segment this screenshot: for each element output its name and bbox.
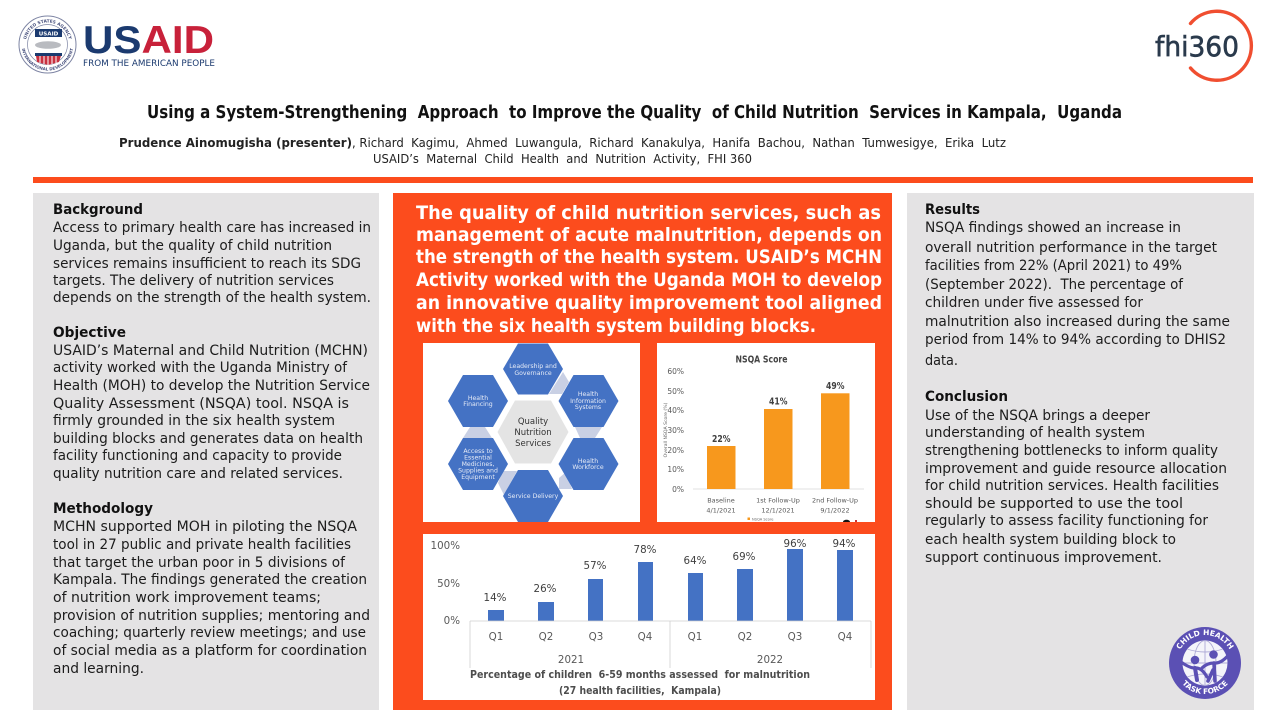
hexagon: information systems: Systems	[575, 404, 601, 411]
objective section	[53, 325, 370, 482]
icon: USAID seal: INTERNATIONAL DEVELOPMENT	[22, 48, 73, 70]
y axis labels	[667, 367, 684, 494]
panel: centre column	[393, 193, 892, 710]
hexagon: medicines: Medicines,	[462, 461, 494, 468]
y axis labels: 60%	[667, 367, 684, 376]
title: Using a System-Strengthening Approach to Improve the Quality of Child Nutrition Services in Kampala, Uganda	[147, 103, 1122, 123]
conclusion section	[925, 389, 1227, 566]
bar values: 69%	[733, 551, 756, 563]
logo text: CHILD HEALTH	[1176, 630, 1234, 650]
hexagon: medicines: Access to	[463, 448, 493, 455]
background section: Background	[53, 202, 143, 218]
methodology section: that target the urban poor in 5 divisions of	[53, 555, 346, 571]
chart caption: (27 health facilities, Kampala)	[559, 684, 721, 697]
hexagon: service delivery	[503, 470, 563, 522]
category labels	[706, 496, 858, 514]
presenter name: Prudence Ainomugisha (presenter)	[119, 135, 352, 150]
conclusion section: regularly to assess facility functioning for	[925, 513, 1208, 529]
bar values: 49%	[826, 381, 845, 392]
methodology section: coaching; quarterly review meetings; and use	[53, 625, 366, 641]
quarter labels: Q3	[589, 631, 603, 643]
methodology section: tool in 27 public and private health facilities	[53, 537, 351, 553]
objective section: Quality Assessment (NSQA) tool. NSQA is	[53, 396, 349, 412]
conclusion section: improvement and guide resource allocation	[925, 461, 1227, 477]
objective section: Objective	[53, 325, 126, 341]
results section: facilities from 22% (April 2021) to 49%	[925, 258, 1182, 274]
category labels: 9/1/2022	[820, 506, 850, 514]
hexagon: leadership: Governance	[514, 370, 552, 377]
hexagon: information systems	[558, 375, 618, 427]
hexagon: leadership	[503, 344, 563, 394]
conclusion section: Use of the NSQA brings a deeper	[925, 408, 1150, 424]
chart caption: Percentage of children 6-59 months assessed for malnutrition	[470, 668, 810, 681]
results section: malnutrition also increased during the same	[925, 314, 1230, 330]
panel: right column	[907, 193, 1254, 710]
figures	[1181, 650, 1231, 681]
year labels: 2021	[558, 654, 584, 666]
objective section: quality nutrition care and related services.	[53, 466, 343, 482]
methodology section: provision of nutrition supplies; mentoring and	[53, 608, 370, 624]
wordmark: fhi360: fhi360	[1155, 30, 1239, 63]
quarter labels: Q1	[688, 631, 702, 643]
logo text	[1176, 630, 1234, 694]
bar values: 57%	[584, 560, 607, 572]
hexagon: centre	[498, 400, 568, 464]
results section: (September 2022). The percentage of	[925, 277, 1184, 293]
background section: Uganda, but the quality of child nutrition	[53, 238, 332, 254]
conclusion section: support continuous improvement.	[925, 550, 1162, 566]
key message	[416, 202, 882, 337]
chart title: NSQA Score	[736, 354, 788, 366]
methodology section: of nutrition work improvement teams;	[53, 590, 321, 606]
icon: USAID seal: UNITED STATES AGENCY	[23, 19, 72, 39]
bars	[707, 393, 850, 489]
chart: NSQA score	[657, 343, 875, 522]
conclusion section: should be supported to use the tool	[925, 496, 1183, 512]
hexagon: service delivery: Service Delivery	[508, 493, 559, 500]
category labels: 12/1/2021	[761, 506, 795, 514]
logo: USAID	[18, 16, 215, 74]
key message: the strength of the health system. USAID’s MCHN	[416, 246, 882, 268]
conclusion section: Conclusion	[925, 389, 1008, 405]
chart: children assessed for malnutrition	[423, 534, 875, 700]
hexagon: information systems: Information	[570, 398, 606, 405]
hexagon: workforce: Health	[578, 458, 598, 465]
bar values: 41%	[769, 396, 788, 408]
hexagon: financing: Financing	[463, 401, 493, 408]
conclusion section: each health system building block to	[925, 532, 1176, 548]
hexagon: medicines: Supplies and	[458, 468, 498, 474]
icon: USAID seal	[18, 16, 76, 74]
objective section: facility functioning and capacity to provide	[53, 448, 342, 464]
y axis labels: 20%	[667, 446, 684, 455]
methodology section: of social media as a platform for coordination	[53, 643, 367, 659]
panel: left column	[33, 193, 379, 710]
hexagon: centre: Nutrition	[514, 428, 552, 438]
y axis labels: 40%	[667, 406, 684, 415]
key message: The quality of child nutrition services, such as	[416, 202, 881, 224]
quarter labels: Q2	[539, 631, 553, 643]
background section	[53, 202, 371, 306]
logo text: TASK FORCE	[1183, 680, 1228, 694]
bar values: 94%	[833, 538, 856, 550]
objective section: building blocks and generates data on health	[53, 431, 363, 447]
affiliation: USAID’s Maternal Child Health and Nutrition Activity, FHI 360	[373, 151, 752, 166]
hexagon: medicines: Equipment	[461, 474, 495, 481]
background section: depends on the strength of the health system.	[53, 290, 371, 306]
methodology section: MCHN supported MOH in piloting the NSQA	[53, 519, 357, 535]
category labels: Baseline	[707, 496, 735, 504]
bar values: 14%	[484, 592, 507, 604]
tagline: FROM THE AMERICAN PEOPLE	[83, 59, 215, 69]
hexagon: information systems: Health	[578, 391, 598, 398]
legend: NSQA Score	[752, 518, 774, 522]
diagram: health system building blocks	[423, 343, 640, 522]
hexagon: financing: Health	[468, 395, 488, 402]
y axis labels	[431, 540, 460, 627]
key message: with the six health system building blocks.	[416, 315, 816, 337]
hexagon: workforce	[558, 438, 618, 490]
y axis labels: 30%	[667, 426, 684, 435]
chart caption	[470, 668, 810, 697]
background section: services remains insufficient to reach its SDG	[53, 256, 361, 272]
background section: targets. The delivery of nutrition services	[53, 273, 334, 289]
arc	[1190, 11, 1251, 80]
results section: NSQA findings showed an increase in	[925, 220, 1181, 236]
y axis labels: 50%	[437, 578, 460, 590]
co-author names: , Richard Kagimu, Ahmed Luwangula, Richard Kanakulya, Hanifa Bachou, Nathan Tumwesigye, Erika Lutz	[352, 135, 1006, 150]
quarter labels: Q4	[838, 631, 852, 643]
background section: Access to primary health care has increased in	[53, 220, 371, 236]
bar values: 96%	[784, 538, 807, 550]
bar values	[484, 538, 856, 604]
category labels: 2nd Follow-Up	[812, 496, 858, 504]
quarter labels: Q4	[638, 631, 652, 643]
objective section: Health (MOH) to develop the Nutrition Service	[53, 378, 370, 394]
logo: Child Health Task Force	[1169, 627, 1241, 699]
bar values: 22%	[712, 434, 731, 445]
conclusion section: for child nutrition services. Health facilities	[925, 478, 1219, 494]
results section: period from 14% to 94% according to DHIS2	[925, 332, 1226, 348]
conclusion section: strengthening bottlenecks to inform quality	[925, 443, 1218, 459]
quarter labels: Q3	[788, 631, 802, 643]
hexagon: workforce: Workforce	[572, 464, 604, 471]
y axis labels: 10%	[667, 465, 684, 474]
bars	[488, 549, 853, 621]
quarter labels: Q2	[738, 631, 752, 643]
hexagon: medicines	[448, 438, 508, 490]
methodology section: Methodology	[53, 501, 154, 517]
hexagon: medicines: Essential	[464, 454, 492, 462]
y axis title: Overall NSQA Score (%)	[663, 402, 669, 457]
year labels: 2022	[757, 654, 783, 666]
y axis labels: 0%	[672, 485, 684, 494]
wordmark: USAID: USAID	[83, 19, 214, 62]
objective section: firmly grounded in the six health system	[53, 413, 335, 429]
category labels: 1st Follow-Up	[756, 496, 800, 504]
key message: management of acute malnutrition, depends on	[416, 224, 882, 246]
quarter labels	[489, 631, 852, 643]
methodology section: and learning.	[53, 661, 144, 677]
key message: Activity worked with the Uganda MOH to develop	[416, 269, 882, 291]
bar values: 64%	[684, 555, 707, 567]
objective section: activity worked with the Uganda Ministry of	[53, 360, 348, 376]
hexagon: financing	[448, 375, 508, 427]
key message: an innovative quality improvement tool aligned	[416, 292, 882, 314]
icon: USAID seal: USAID	[39, 32, 59, 38]
y axis labels: 0%	[444, 615, 460, 627]
bar values: 78%	[634, 544, 657, 556]
bar values: 26%	[534, 583, 557, 595]
hexagon: centre: Services	[515, 439, 551, 449]
authors	[119, 135, 1006, 166]
methodology section: Kampala. The findings generated the creation	[53, 572, 367, 588]
year labels	[558, 654, 783, 666]
hexagon: leadership: Leadership and	[509, 363, 557, 370]
bar values	[712, 381, 845, 445]
methodology section	[53, 501, 370, 677]
results section: data.	[925, 353, 958, 369]
results section: Results	[925, 202, 980, 218]
y axis labels: 50%	[667, 387, 684, 396]
objective section: USAID’s Maternal and Child Nutrition (MCHN)	[53, 343, 368, 359]
hexagon: centre: Quality	[518, 417, 548, 427]
results section: children under five assessed for	[925, 295, 1143, 311]
y axis labels: 100%	[431, 540, 460, 552]
category labels: 4/1/2021	[706, 506, 736, 514]
logo: fhi360	[1155, 11, 1251, 80]
results section	[925, 202, 1230, 369]
quarter labels: Q1	[489, 631, 503, 643]
results section: overall nutrition performance in the target	[925, 240, 1217, 256]
conclusion section: understanding of health system	[925, 425, 1145, 441]
